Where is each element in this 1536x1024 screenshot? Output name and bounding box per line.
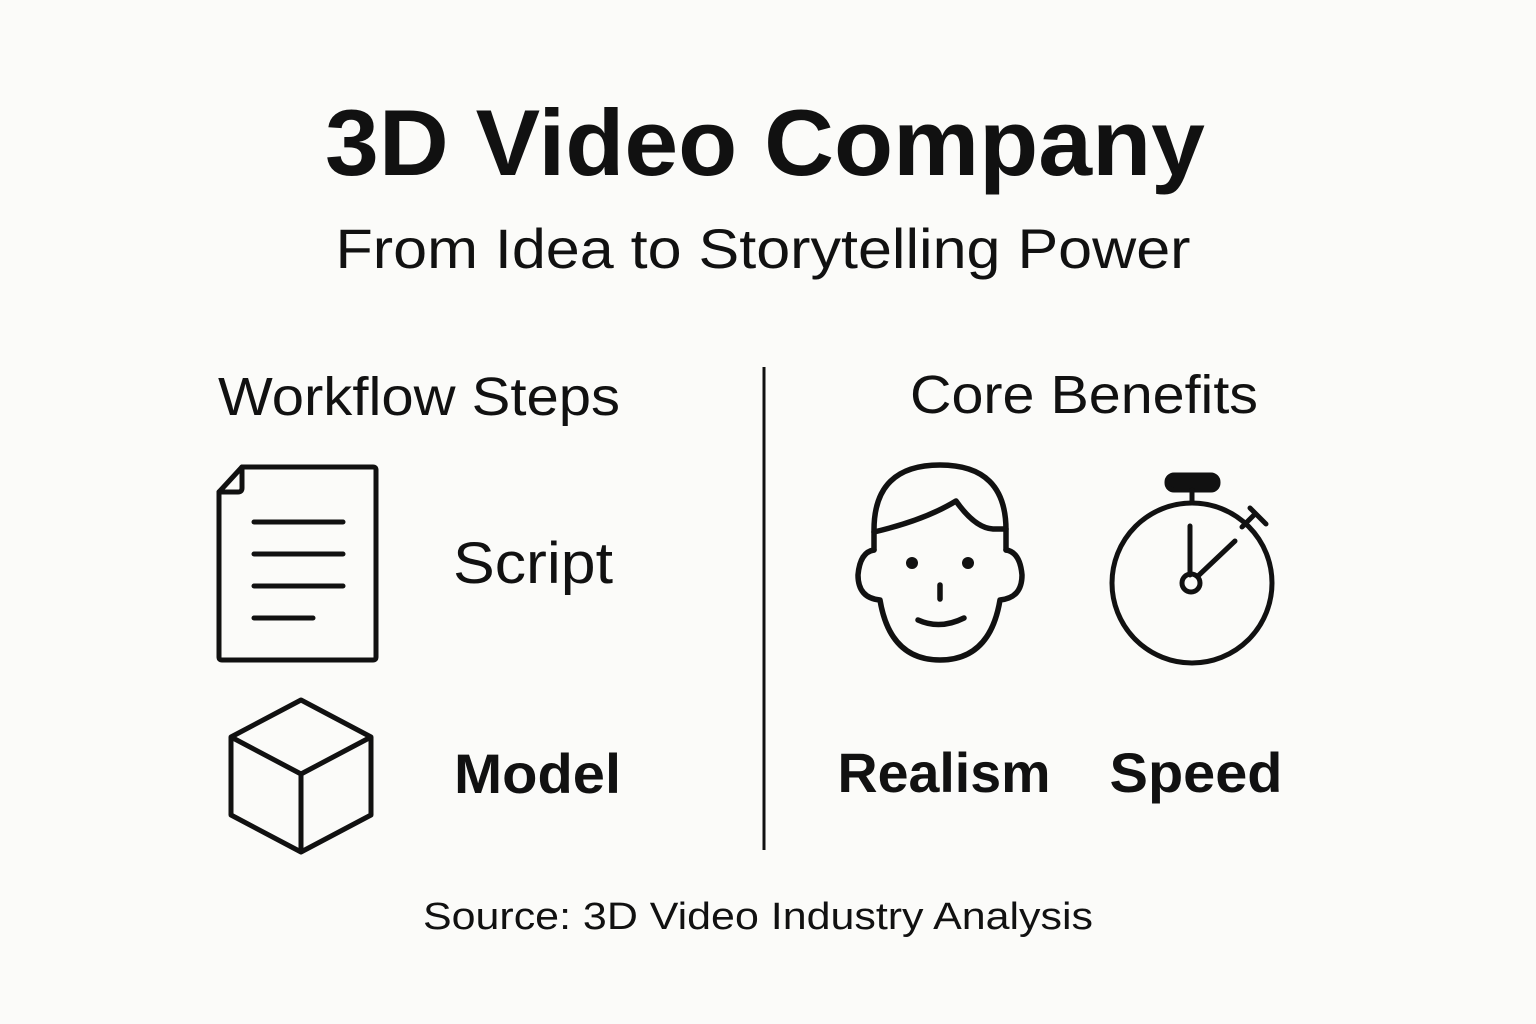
- heading: core benefits: Core Benefits: [910, 365, 1258, 425]
- icon: face: [858, 465, 1022, 660]
- subtitle: From Idea to Storytelling Power: [336, 217, 1190, 280]
- label: model: Model: [454, 742, 621, 805]
- source note: Source: 3D Video Industry Analysis: [423, 896, 1093, 938]
- icon: stopwatch: [1112, 475, 1272, 663]
- divider: [762, 367, 766, 850]
- icon: cube: [231, 700, 371, 852]
- icon: document: [219, 467, 376, 660]
- label: speed: Speed: [1110, 741, 1282, 804]
- label: realism: Realism: [838, 741, 1050, 804]
- heading: workflow steps: Workflow Steps: [218, 367, 620, 427]
- label: script: Script: [453, 531, 613, 596]
- title: 3D Video Company: [325, 90, 1205, 195]
